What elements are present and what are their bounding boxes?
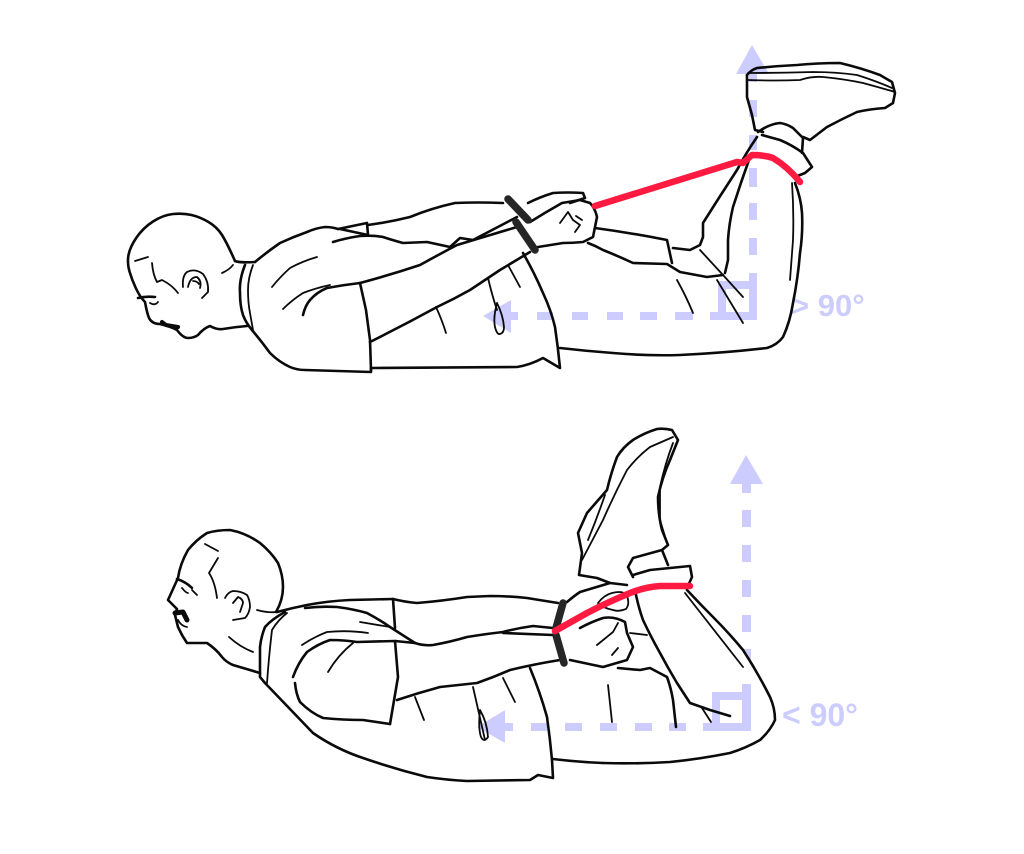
shoe and sock	[578, 429, 692, 588]
head	[168, 530, 283, 673]
angle guide: vertical and horizontal dashed arrows with square corner	[483, 45, 769, 333]
angle label: > 90°	[791, 288, 865, 323]
shirt and collar	[260, 599, 603, 781]
shirt and collar	[240, 227, 560, 372]
resistance band	[555, 586, 690, 631]
legs and trousers	[560, 135, 812, 355]
arms and hands	[333, 192, 597, 342]
top figure: knee angle greater than 90 degrees	[128, 45, 895, 372]
legs and trousers	[603, 590, 775, 763]
arms and hands	[393, 583, 647, 700]
resistance band	[595, 155, 800, 206]
shoe and sock	[747, 63, 895, 153]
bottom figure: knee angle less than 90 degrees	[168, 429, 858, 781]
head	[128, 214, 255, 338]
angle label: < 90°	[782, 697, 858, 733]
angle guide: vertical and horizontal dashed arrows with square corner	[477, 455, 763, 743]
